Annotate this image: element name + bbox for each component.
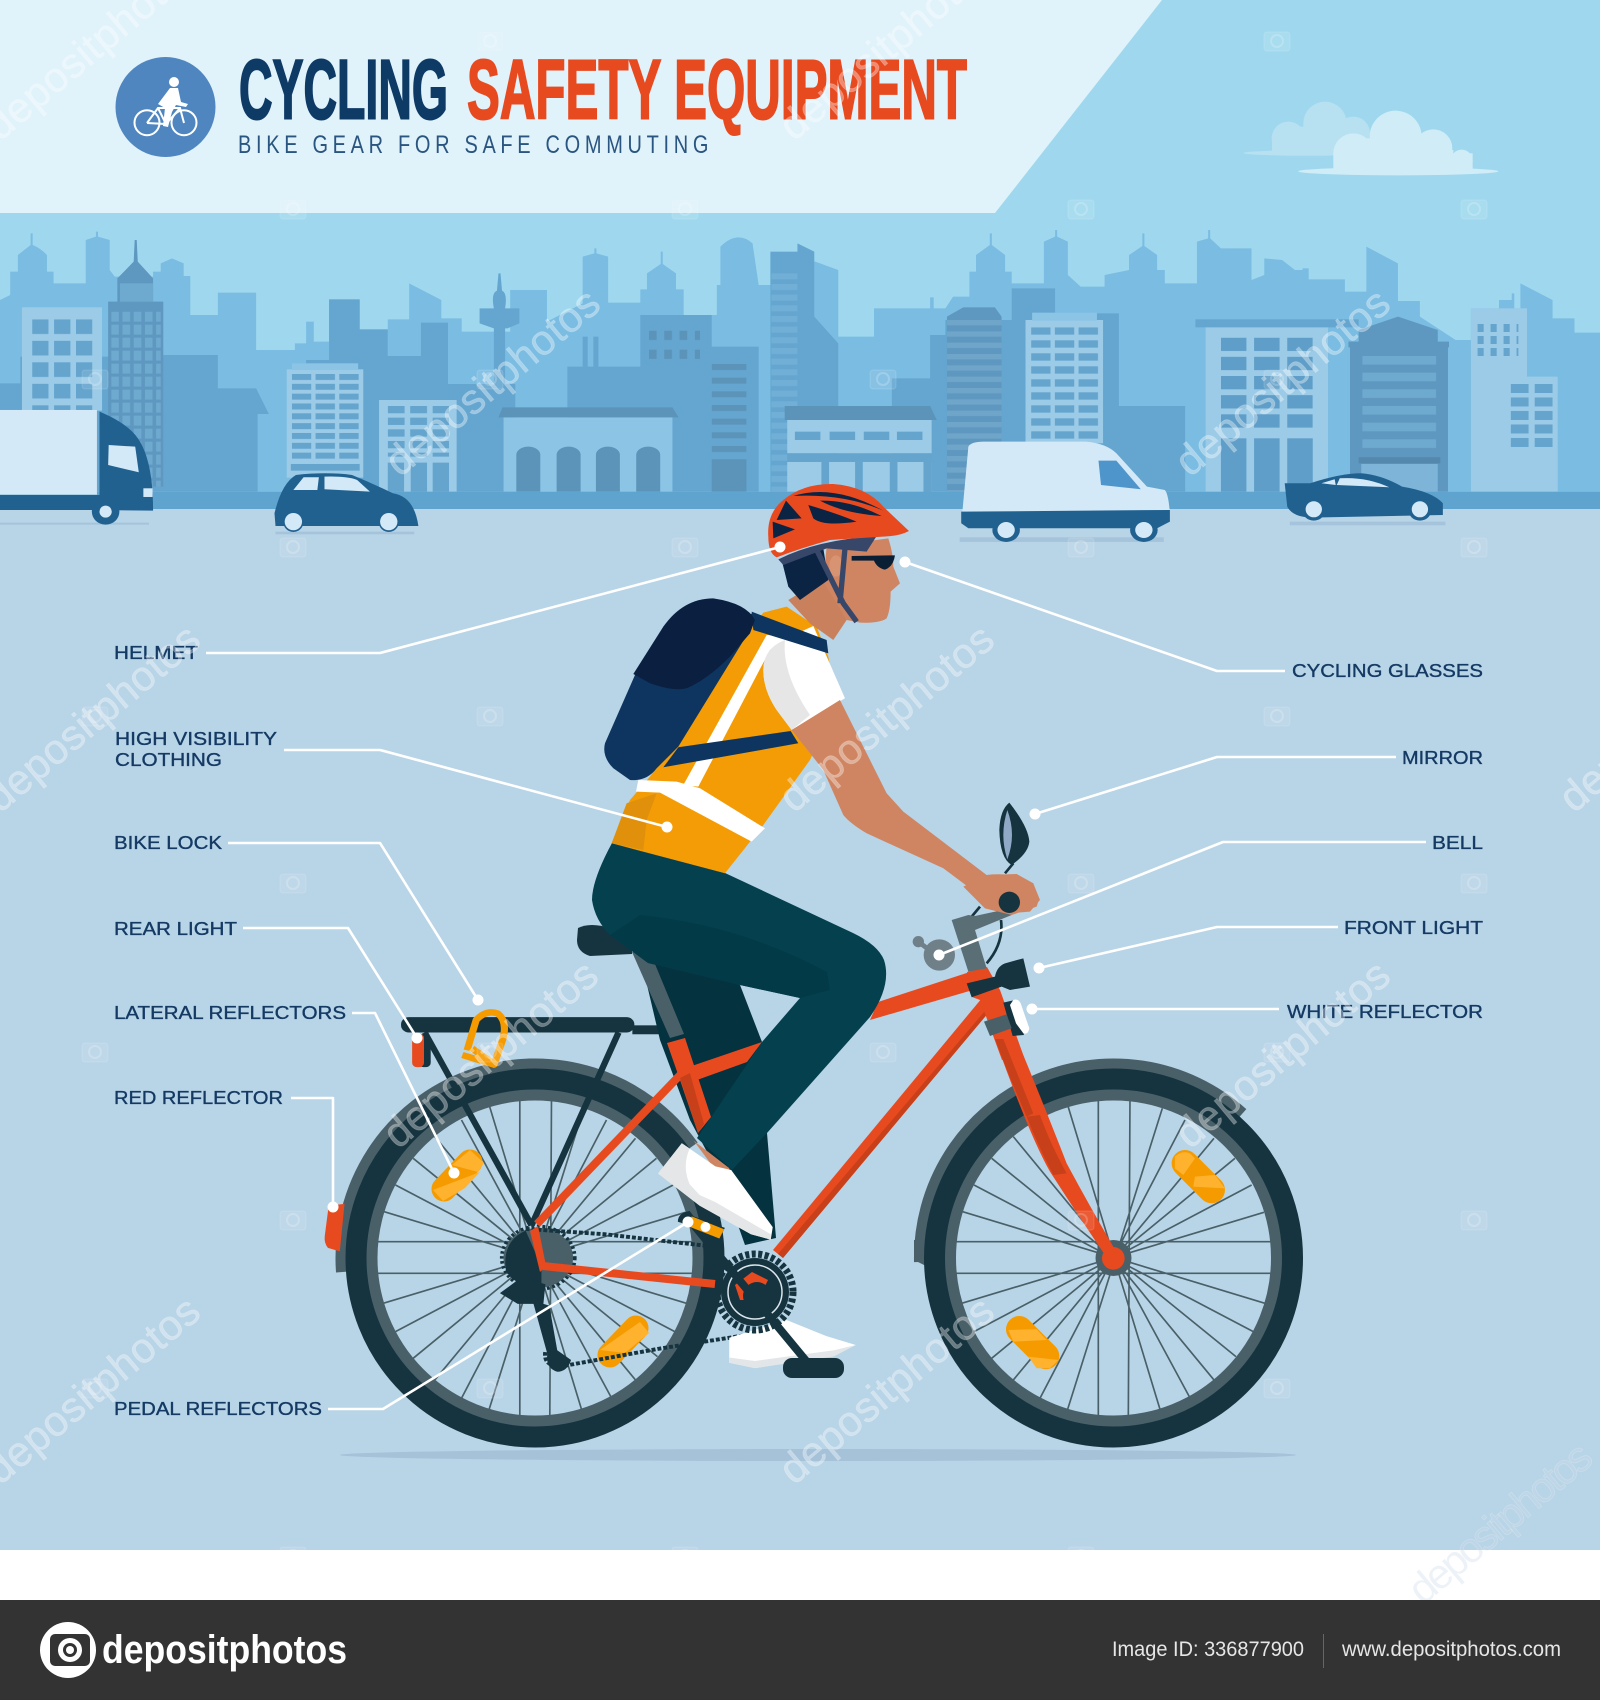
- front wheel reflectors: [1008, 1152, 1225, 1368]
- front wheel: [914, 1065, 1292, 1436]
- label: cycling glasses: CYCLING GLASSES: [1292, 660, 1483, 681]
- label: high visibility clothing: CLOTHING: [115, 749, 222, 770]
- skyline right: [785, 230, 1600, 492]
- helmet: [768, 484, 909, 557]
- handlebar, mirror, bell, front light, white reflector: [913, 803, 1039, 1036]
- skyline left: [0, 232, 801, 492]
- head: [768, 484, 909, 623]
- hatchback car: [274, 473, 418, 534]
- title icon: cyclist badge: [116, 57, 216, 157]
- chain: [526, 1229, 775, 1366]
- ground shadow: [340, 1449, 1296, 1461]
- watermark cameras: [82, 32, 1487, 1566]
- arm: [792, 700, 1040, 913]
- brake cables: [972, 863, 1013, 963]
- label: helmet: HELMET: [114, 642, 198, 663]
- road edge band: [0, 492, 1600, 509]
- front cloud: [1298, 111, 1498, 175]
- watermark text: depositphotos: [1166, 951, 1399, 1157]
- watermark text: depositphotos: [1166, 279, 1399, 485]
- reflective stripes: [636, 635, 790, 842]
- saddle: [577, 925, 632, 956]
- low building: [785, 406, 937, 492]
- rear rack and rear light: [325, 1012, 775, 1372]
- straps: [663, 612, 828, 767]
- light building B: [287, 363, 363, 478]
- frame: [530, 967, 1125, 1284]
- light building C: [379, 400, 457, 492]
- sleeve: [763, 626, 845, 730]
- helmet strap band: [778, 536, 877, 565]
- footer logo icon: [40, 1622, 96, 1678]
- label: high visibility clothing: HIGH VISIBILITY: [115, 728, 277, 749]
- stem: [952, 908, 1012, 972]
- rear light: [412, 1034, 431, 1067]
- pediment building: [1348, 317, 1449, 492]
- label: bike lock: BIKE LOCK: [114, 832, 223, 853]
- light building D: [1026, 313, 1103, 443]
- image id: Image ID: 336877900: [1112, 1638, 1304, 1661]
- crank and pedals: [678, 1211, 844, 1378]
- label: mirror: MIRROR: [1402, 747, 1483, 768]
- backpack: [604, 598, 828, 780]
- pedal reflector: [678, 1211, 725, 1239]
- label: bell: BELL: [1432, 832, 1483, 853]
- van: [960, 442, 1170, 542]
- far shoe: [729, 1320, 856, 1368]
- bicycle: [325, 843, 1291, 1436]
- footer divider: [1323, 1634, 1324, 1668]
- arcade building: [498, 407, 679, 492]
- label: red reflector: RED REFLECTOR: [114, 1087, 283, 1108]
- cassette: [502, 1226, 575, 1289]
- label lines: [206, 547, 1426, 1409]
- rear wheel: [338, 1065, 713, 1436]
- label: lateral reflectors: LATERAL REFLECTORS: [114, 1002, 346, 1023]
- header panel: [0, 0, 1162, 213]
- bell: [913, 936, 955, 971]
- footer logo text: depositphotos: [102, 1628, 347, 1672]
- watermark text: depositphotos: [374, 951, 607, 1157]
- rear wheel reflectors: [433, 1150, 649, 1355]
- reflector and clamp: [984, 1000, 1029, 1036]
- footer bar: [0, 1600, 1600, 1700]
- light building E: [1471, 308, 1558, 492]
- watermark text: depositphotos: [1399, 1432, 1600, 1613]
- sports car: [1285, 473, 1445, 525]
- watermark text: depositphotos: [770, 1287, 1003, 1493]
- neck: [788, 577, 847, 640]
- background sky: [0, 0, 1600, 510]
- label: white reflector: WHITE REFLECTOR: [1287, 1001, 1483, 1022]
- label: front light: FRONT LIGHT: [1344, 917, 1483, 938]
- glasses: [852, 555, 895, 570]
- big building: [1195, 319, 1359, 492]
- watermark text: depositphotos: [376, 279, 609, 485]
- tall tower: [770, 252, 801, 492]
- subtitle: BIKE GEAR FOR SAFE COMMUTING: [238, 131, 708, 159]
- white strip: [0, 1550, 1600, 1600]
- labels right: [1287, 660, 1483, 1022]
- light building A: [22, 307, 102, 411]
- seat post: [632, 952, 684, 1038]
- truck: [0, 410, 153, 525]
- title: CYCLING: [239, 42, 448, 136]
- cyclist: [604, 484, 1040, 913]
- front light: [967, 958, 1030, 997]
- mirror: [999, 803, 1029, 865]
- label: rear light: REAR LIGHT: [114, 918, 237, 939]
- near shoe: [658, 1141, 773, 1240]
- derailleur: [500, 1277, 571, 1372]
- watermark text: depositphotos: [770, 615, 1003, 821]
- front hub: [1096, 1240, 1132, 1276]
- label: high visibility clothing: [115, 728, 277, 770]
- near leg: [592, 843, 886, 1170]
- title accent: SAFETY EQUIPMENT: [467, 42, 967, 136]
- dark tower right: [947, 307, 1002, 492]
- red reflector: [325, 1204, 345, 1251]
- bike lock: [462, 1012, 504, 1065]
- labels left: [114, 642, 346, 1419]
- label dots: [328, 542, 1044, 1232]
- fork: [995, 1039, 1125, 1270]
- far leg: [640, 955, 776, 1245]
- website: www.depositphotos.com: [1341, 1638, 1561, 1661]
- back cloud: [1243, 102, 1372, 156]
- chainring: [717, 1254, 793, 1330]
- grip: [963, 874, 1039, 915]
- vest: [612, 607, 837, 873]
- label: pedal reflectors: PEDAL REFLECTORS: [114, 1398, 322, 1419]
- clouds: [1243, 102, 1498, 175]
- ground: [0, 509, 1600, 1550]
- dark tower: [108, 240, 163, 487]
